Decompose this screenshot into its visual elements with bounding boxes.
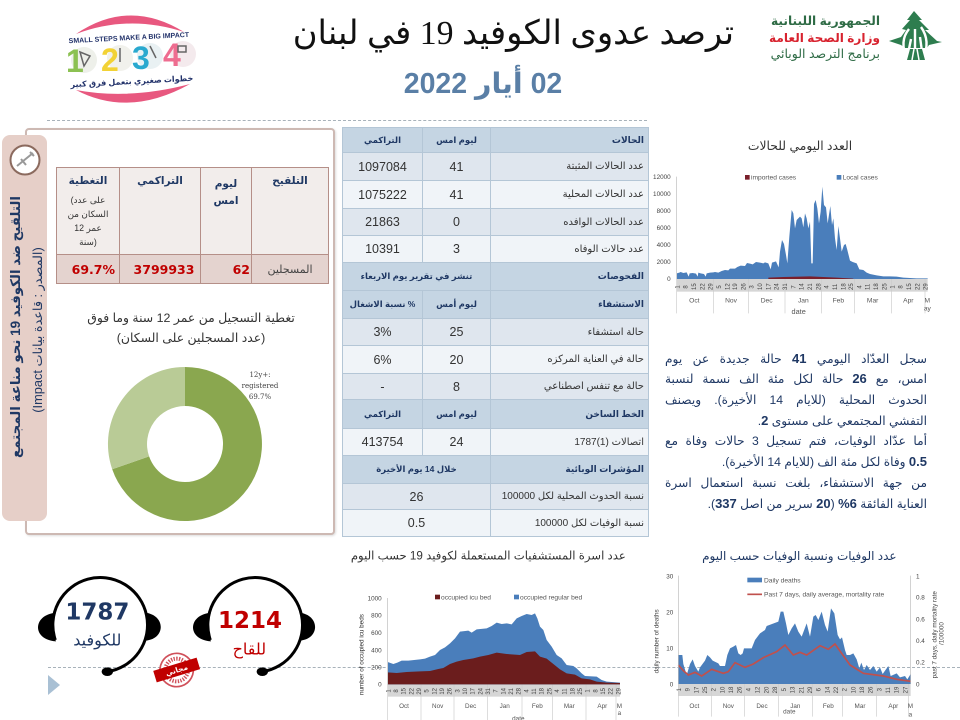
main data table: 20 [450,352,463,366]
vaccination table: 3799933 [134,262,194,276]
month labels: Mar [564,703,575,710]
date ticks: 17 [766,283,772,290]
month labels [399,703,622,720]
main data table: خلال 14 يوم الأخيرة [376,464,457,474]
main data table: 6% [373,352,392,366]
date ticks: 25 [703,686,709,693]
date ticks: 17 [471,687,477,695]
main data table: ليوم امس [436,408,477,418]
chart: deaths and mortality rate: Past 7 days, daily average, mortality rate [764,592,885,599]
main data table: 1075222 [358,188,407,202]
vaccination table: 69.7% [72,262,115,276]
date ticks: 22 [834,686,840,693]
date ticks: 25 [547,687,553,695]
sidebar source text: (المصدر : قاعدة بيانات Impact) [30,247,45,413]
date ticks: 15 [907,283,913,290]
vaccination table: (على عدد [71,195,105,205]
main data table: حالة استشفاء [588,326,644,338]
date ticks: 24 [478,687,484,695]
date ticks: 22 [915,283,921,290]
vaccination table: ليوم [215,178,237,190]
date ticks: 8 [593,689,599,693]
date ticks: 1 [891,285,897,289]
date ticks: 18 [570,687,576,695]
axis labels: 4000 [657,242,671,249]
legend [747,578,762,582]
chart: hospital beds [351,549,626,720]
month labels [689,298,932,316]
month labels: Oct [689,298,700,305]
vaccination table: التغطية [69,175,107,187]
hotline headsets [38,576,316,688]
date heading: 02 أيار 2022 [404,68,562,100]
logo: small steps make a big impact [66,16,196,103]
dashed divider bottom [48,667,960,668]
logo: ministry of public health [769,11,942,61]
month labels: Mar [855,703,865,710]
month labels: M [617,703,622,710]
text block: daily summary: الحدوث المحلية (للايام 14 الأخيرة). ويصنف [665,393,927,407]
date ticks: 11 [532,688,538,695]
text block: daily summary: سجل العدّاد اليومي 41 حالة جديدة عن يوم [665,351,927,366]
date ticks: 14 [825,686,831,693]
date ticks: 18 [841,283,847,290]
date ticks: 5 [717,285,723,289]
date ticks: 8 [684,285,690,289]
axis labels: 12000 [653,174,671,181]
date ticks: 10 [851,686,857,693]
vaccination table: امس [214,195,238,207]
date ticks: 28 [517,687,523,695]
date ticks: 14 [800,283,806,290]
title: ترصد عدوى الكوفيد 19 في لبنان [293,15,734,52]
main data table: 26 [410,490,423,504]
headset: vaccine hotline 1214: 1214 [218,608,282,634]
panel: vaccination [25,128,335,535]
date ticks: 3 [750,285,756,289]
date ticks: 21 [808,283,814,290]
date ticks: 11 [866,283,872,290]
axis labels: 0.4 [916,638,925,645]
date ticks: 1 [586,689,592,693]
chart: deaths and mortality rate: Daily deaths [764,577,801,584]
axis labels: 0.6 [916,616,925,623]
axis labels: 600 [371,630,382,637]
date ticks: 10 [463,687,469,695]
month labels: a [618,710,622,717]
date ticks: 27 [903,686,909,693]
date ticks: 25 [849,283,855,290]
main data table: الحالات [612,134,644,144]
text block: daily summary: 0.5 وفاة لكل مئة الف (للايام 14 الأخيرة). [722,454,927,469]
logo: small steps make a big impact: 2 [101,42,119,78]
axis labels: 800 [371,613,382,620]
icon: cedar [889,11,942,60]
date ticks: 26 [741,283,747,290]
date ticks: 14 [501,687,507,695]
main data table: - [380,380,385,394]
axis labels [653,174,671,283]
headset: covid hotline 1787: للكوفيد [73,632,121,650]
month labels: Apr [903,298,914,305]
date ticks: 10 [758,283,764,290]
date ticks: 28 [816,283,822,290]
date ticks: 2 [843,687,849,691]
headset: covid hotline 1787: 1787 [65,599,129,625]
vaccination table: التلقيح [272,175,308,187]
main data table: عدد حالات الوفاه [574,244,644,254]
date ticks: 26 [738,686,744,693]
text block: daily summary: التفشي المجتمعي على مستوى 2. [758,413,927,428]
chart: deaths and mortality rate [654,549,946,719]
month labels: Feb [823,703,834,710]
date ticks: 1 [677,687,683,691]
month labels: date [792,307,806,316]
date ticks: 7 [494,689,500,693]
text block: daily summary: امس، مع 26 حالة لكل مئة الف نسمة لنسبة [665,371,927,386]
date ticks: 9 [686,687,692,691]
date ticks: 15 [402,687,408,695]
month labels: a [909,712,913,719]
main data table: 24 [450,435,463,449]
text block: daily summary: أما عدّاد الوفيات، فتم تسجيل 3 حالات وفاة مع [665,434,927,448]
date ticks: 18 [874,283,880,290]
date ticks: 7 [791,285,797,289]
date ticks: 11 [886,686,892,693]
chart: daily cases: Local cases [843,175,878,182]
dashed divider top [47,120,647,121]
chart: deaths and mortality rate: past 7 days, daily mortality rate [932,591,939,678]
chart: daily cases [653,139,932,316]
date ticks: 8 [394,689,400,693]
date ticks: 1 [386,689,392,693]
axis labels: 0 [670,681,674,688]
axis labels: 1000 [368,596,382,603]
date ticks: 4 [746,687,752,691]
vaccination table [56,167,329,284]
axis labels: 8000 [657,208,671,215]
date ticks: 15 [601,687,607,695]
main data table: 8 [453,380,460,394]
main data table: 21863 [365,215,400,229]
date ticks: 18 [860,686,866,693]
month labels: Apr [888,703,898,710]
main data table: 41 [450,160,463,174]
date ticks: 2 [712,687,718,691]
ministry name lines: الجمهورية اللبنانية [771,14,880,28]
date ticks: 19 [733,283,739,290]
date ticks: 12 [755,686,761,693]
date ticks: 6 [817,687,823,691]
legend [435,595,440,599]
month labels: M [908,703,913,710]
main data table: عدد الحالات المثبتة [566,161,644,172]
axis labels: 6000 [657,225,671,232]
chart title: العدد اليومي للحالات [748,139,852,154]
main data table: % نسبة الاشغال [350,299,415,309]
date ticks: 3 [455,689,461,693]
main data table: حالة في العناية المركزه [547,354,644,365]
text block: daily summary: العناية الفائقة 6% (20 سرير من اصل 337). [708,496,927,511]
month labels: Dec [465,703,476,710]
date ticks: 4 [857,285,863,289]
donut label: 12y+: [249,371,271,379]
month labels: Feb [532,703,543,710]
chart: daily cases: imported cases [751,175,797,182]
date ticks: 15 [692,283,698,290]
text block: daily summary: من جهة الاستشفاء، بلغت نسبة استعمال اسرة [665,476,927,490]
date ticks: 11 [833,283,839,290]
date ticks: 29 [616,687,622,695]
main data table [342,127,649,537]
date ticks: 12 [725,283,731,290]
main data table: 3% [373,325,392,339]
date ticks: 18 [729,686,735,693]
date ticks: 21 [799,686,805,693]
month labels: Nov [725,298,738,305]
date ticks: 28 [773,686,779,693]
axis labels: 10 [666,645,674,652]
axis labels: 0 [667,276,671,283]
date ticks: 4 [825,285,831,289]
chart: hospital beds: occupied regular bed [520,594,582,601]
date ticks: 4 [524,689,530,693]
vaccination table: المسجلين [267,264,312,276]
axis labels: 0.8 [916,595,925,602]
headset: vaccine hotline 1214 [193,578,315,676]
month labels: Dec [756,703,768,710]
date ticks [386,687,622,695]
sidebar heading text: التلقيح ضد الكوفيد 19 نحو مناعة المجتمع [8,196,23,458]
main data table: 10391 [365,242,400,256]
logo: small steps make a big impact: SMALL STEPS MAKE A BIG IMPACT [69,32,190,45]
month labels: Oct [399,703,409,710]
main data table: عدد الحالات المحلية [563,189,644,200]
chart title: عدد الوفيات ونسبة الوفيات حسب اليوم [702,549,897,564]
chart: hospital beds: occupied icu bed [441,594,491,601]
month labels: Dec [761,298,773,305]
date ticks: 19 [440,687,446,695]
vaccination table: السكان من [68,209,108,219]
main data table: 0.5 [408,516,425,530]
date ticks: 17 [694,686,700,693]
vaccination table: سنة) [79,237,97,247]
logo: small steps make a big impact: 4 [163,37,181,73]
main data table: 25 [450,325,463,339]
date ticks: 22 [609,687,615,695]
axis labels: 10000 [653,191,671,198]
axis labels: 0.2 [916,660,925,667]
date ticks: 31 [486,687,492,695]
date ticks: 22 [700,283,706,290]
logo: small steps make a big impact: 3 [132,40,150,76]
chart: deaths and mortality rate: /100000 [939,622,946,645]
axis labels: 400 [371,647,382,654]
main data table: 3 [453,242,460,256]
date ticks: 12 [432,687,438,695]
month labels [689,703,913,719]
donut label: registered [242,382,279,390]
main data table: 413754 [362,435,403,449]
donut heading [87,311,295,345]
date ticks: 5 [425,689,431,693]
main data table: عدد الحالات الوافده [563,216,644,228]
date ticks: 10 [720,686,726,693]
date ticks: 26 [869,686,875,693]
main data table: المؤشرات الوبائية [565,464,644,474]
date ticks: 20 [764,686,770,693]
date ticks: 4 [555,689,561,693]
date ticks: 5 [782,687,788,691]
month labels: Oct [689,703,699,710]
icon: syringe badge [10,144,40,176]
month labels: M [925,298,930,305]
vaccination table: عمر 12 [74,223,102,233]
axis labels [368,596,382,689]
main data table: نسبة الحدوث المحلية لكل 100000 [502,491,644,502]
logo: small steps make a big impact: خطوات صغيري بتعمل فرق كبير [69,74,194,89]
vaccination table: التراكمي [137,175,183,187]
month labels: ay [924,306,932,313]
date ticks: 29 [417,687,423,695]
registered share [112,367,262,521]
date ticks: 31 [783,283,789,290]
date ticks: 24 [775,283,781,290]
donut heading: تغطية التسجيل من عمر 12 سنة وما فوق [87,311,295,325]
date ticks: 25 [578,687,584,695]
date ticks: 8 [899,285,905,289]
axis labels: 0 [378,682,382,689]
main data table: التراكمي [364,408,401,418]
donut heading: (عدد المسجلين على السكان) [117,331,265,345]
donut label [242,371,279,401]
donut chart [108,367,279,521]
axis labels: 20 [666,609,674,616]
legend [745,175,750,180]
date ticks [676,283,929,290]
panel sidebar: vaccination heading [2,135,47,521]
main data table: اتصالات (1)1787 [574,436,644,448]
month labels: Apr [597,703,607,710]
month labels: Feb [833,298,844,305]
chart: hospital beds: number of occupied icu beds [358,614,365,695]
headset: vaccine hotline 1214: للقاح [233,642,266,660]
main data table: الاستشفاء [598,299,644,309]
text block: daily summary [665,351,927,511]
stamp: toll free [150,647,203,693]
axis labels: 1 [916,573,920,580]
date ticks: 19 [895,686,901,693]
date ticks: 21 [509,687,515,695]
logo: ministry of public health: برنامج الترصد الوبائي [771,47,880,61]
axis labels: 200 [371,665,382,672]
vaccination table: 62 [233,262,250,276]
logo: small steps make a big impact: 1 [66,43,84,79]
date ticks: 29 [808,686,814,693]
main data table: نسبة الوفيات لكل 100000 [535,518,644,528]
month labels: Nov [723,703,735,710]
main data table: الخط الساخن [585,408,644,418]
logo: ministry of public health: وزارة الصحة العامة [769,31,880,45]
arrow: decorative slide marker [48,675,60,695]
stamp: toll free: مجاني [165,663,189,678]
axis labels: 30 [666,573,674,580]
headset: covid hotline 1787 [38,578,161,676]
month labels: Nov [432,703,444,710]
month labels: date [783,709,796,716]
main data table: التراكمي [364,134,401,144]
month labels: Jan [798,298,809,305]
date ticks: 22 [409,687,415,695]
main data table: ليوم أمس [436,299,477,309]
date ticks: 26 [448,687,454,695]
axis labels [666,573,925,688]
axis labels: 0 [916,681,920,688]
main data table: تنشر في تقرير يوم الاربعاء [361,271,472,281]
axis labels: 2000 [657,259,671,266]
date ticks: 11 [563,688,569,695]
date ticks: 3 [877,687,883,691]
main data table: الفحوصات [598,271,644,281]
date ticks: 13 [791,686,797,693]
main data table: 41 [450,188,463,202]
date ticks: 18 [540,687,546,695]
month labels: Jan [790,703,801,710]
chart title: عدد اسرة المستشفيات المستعملة لكوفيد 19 حسب اليوم [351,549,626,563]
date ticks: 1 [676,285,682,289]
main data table: 1097084 [358,160,407,174]
date ticks: 29 [709,283,715,290]
donut label: 69.7% [249,393,271,401]
main data table: حالة مع تنفس اصطناعي [544,381,644,392]
date ticks: 29 [923,283,929,290]
month labels: Jan [500,703,510,710]
unregistered share [108,367,185,469]
date ticks [677,686,909,693]
chart: deaths and mortality rate: daily number of deaths [654,609,661,673]
mortality rate line [678,644,911,681]
date ticks: 25 [882,283,888,290]
main data table: 0 [453,215,460,229]
month labels: Mar [867,298,879,305]
main data table: ليوم امس [436,134,477,144]
